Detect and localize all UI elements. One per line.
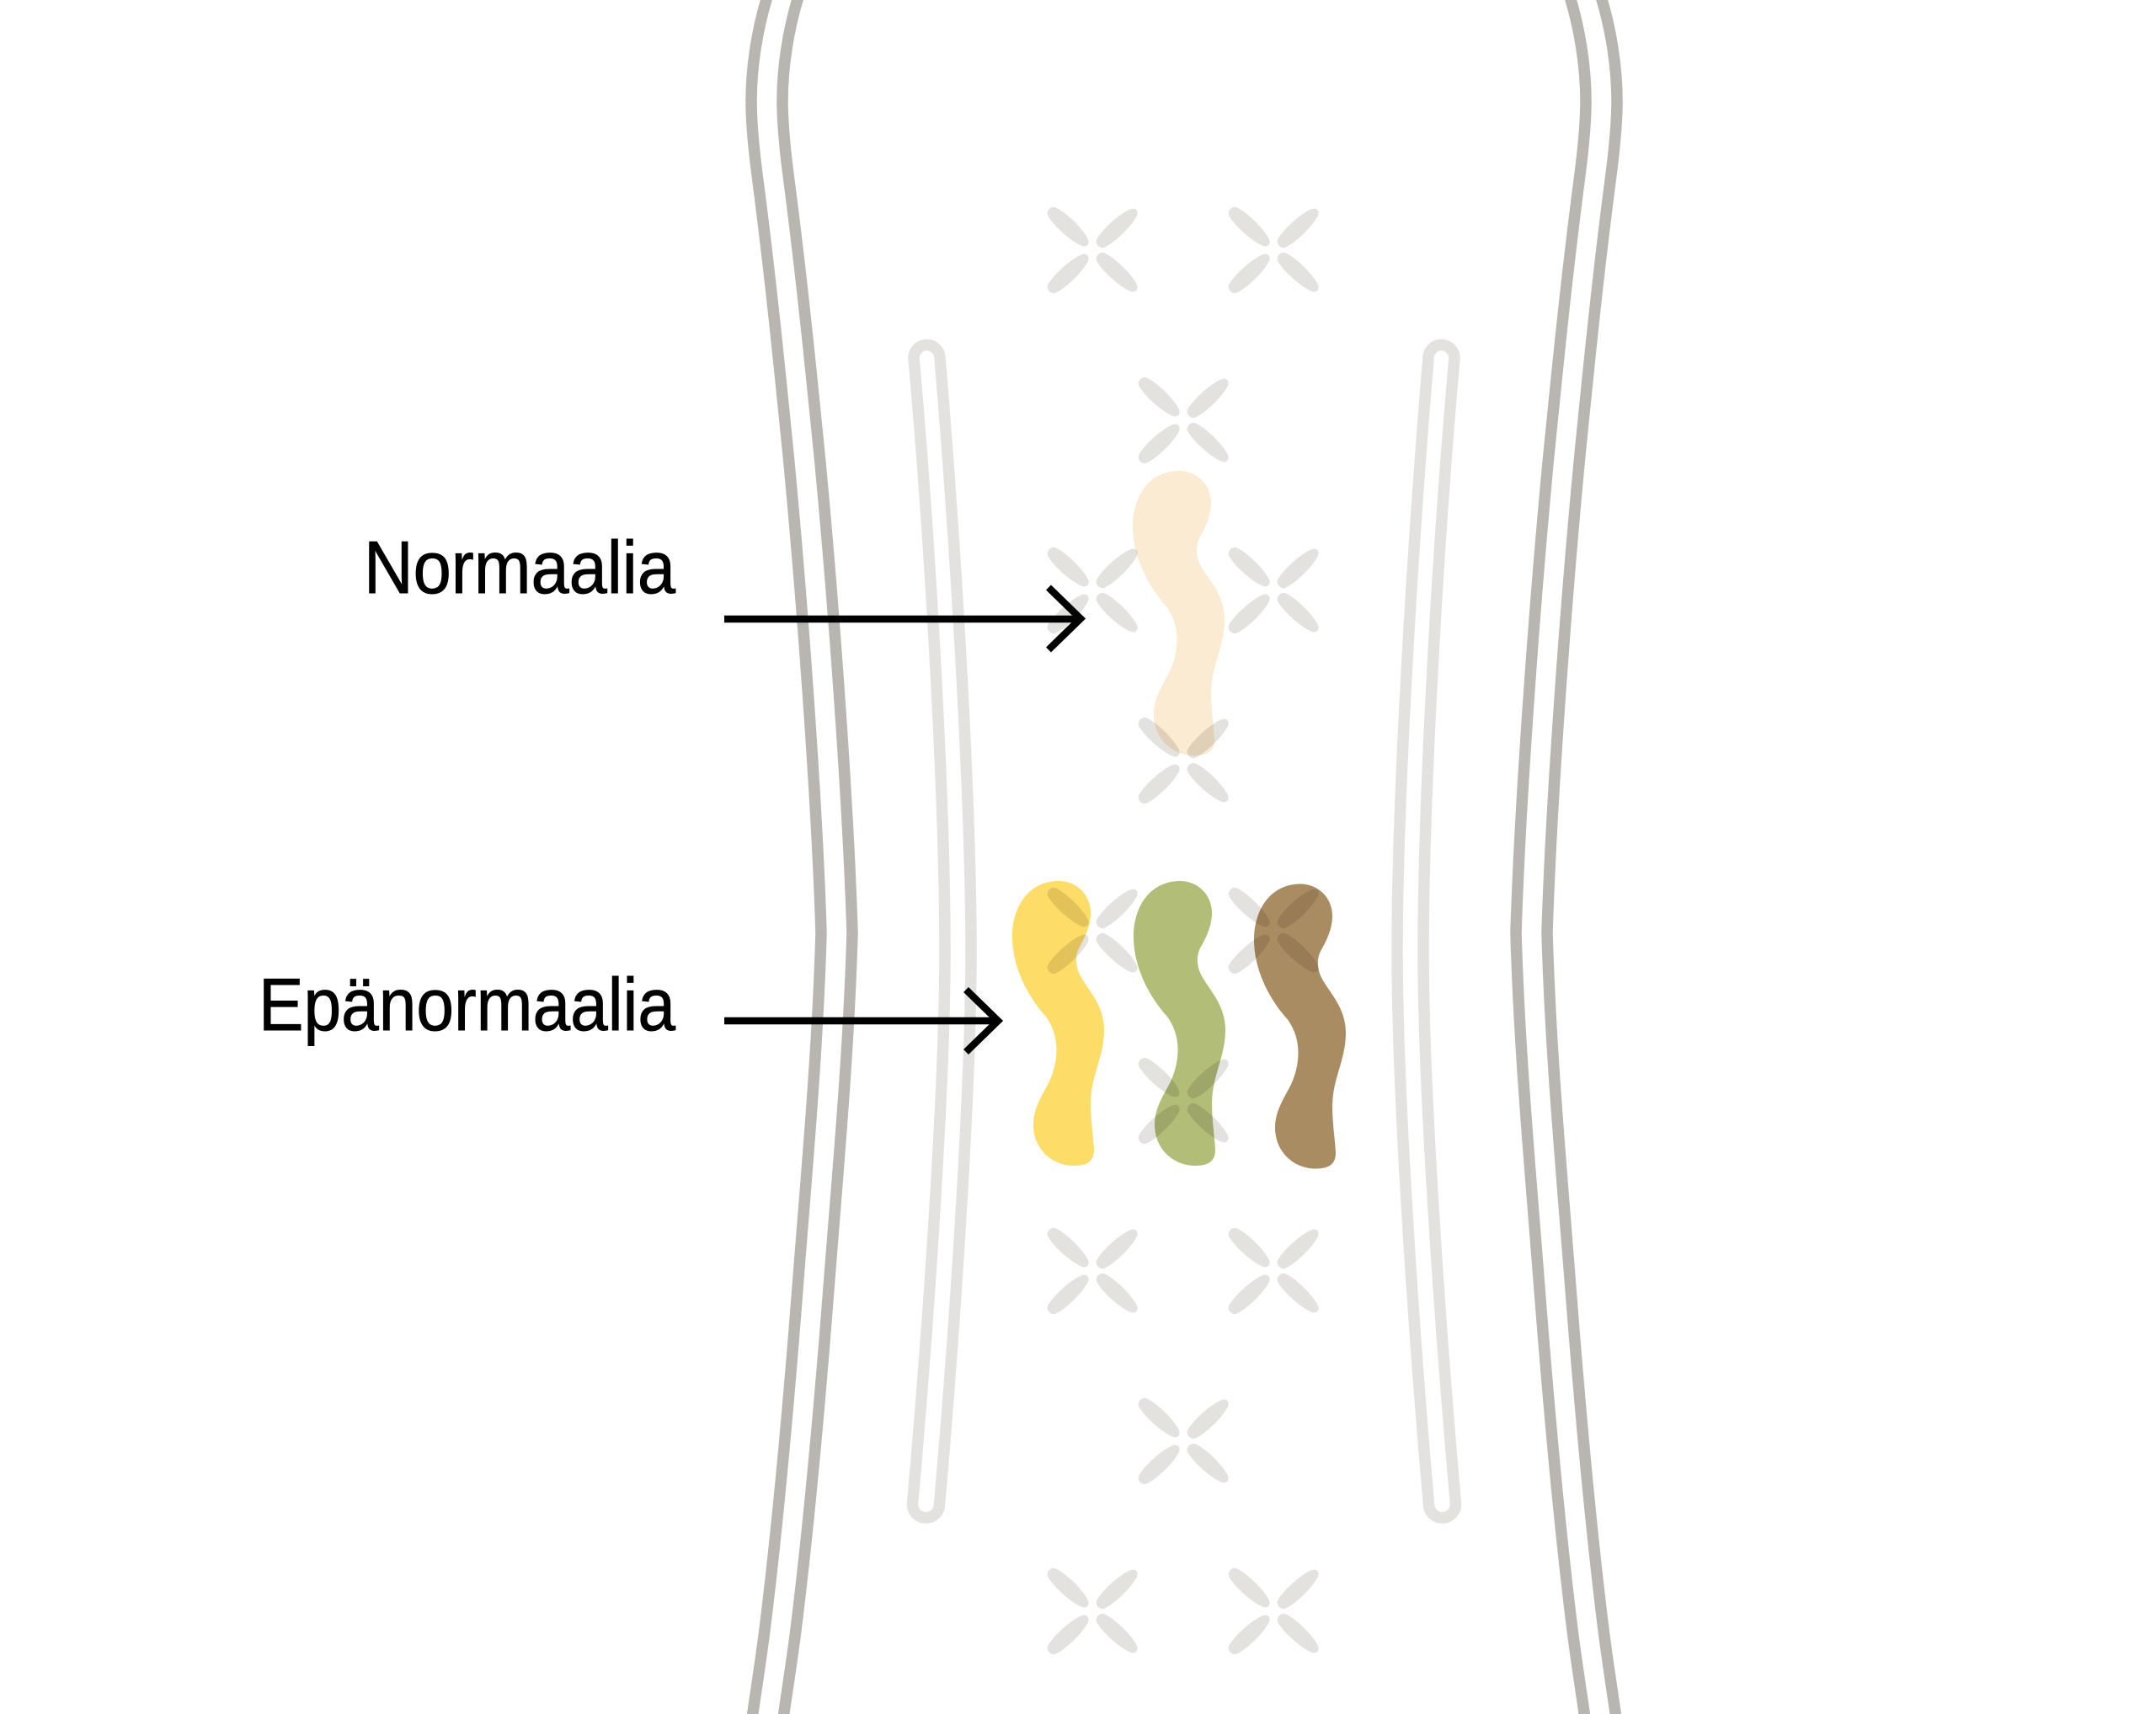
left inner edge: [782, 0, 852, 1714]
arrow: abnormal: [724, 990, 998, 1052]
right inner edge: [1516, 0, 1586, 1714]
pad outline: [751, 0, 1617, 1714]
right outer edge: [1547, 0, 1617, 1714]
blob: abnormal green: [1134, 881, 1225, 1166]
label: normal: Normaalia: [364, 526, 675, 609]
discharge blobs: [1012, 471, 1346, 1169]
blob: normal cream: [1133, 471, 1225, 756]
blob: abnormal brown: [1254, 884, 1346, 1169]
arrow: normal: [724, 588, 1081, 650]
right inner channel: [1397, 344, 1455, 1518]
left inner channel: [913, 344, 971, 1518]
blob: abnormal yellow: [1012, 881, 1104, 1166]
left outer edge: [751, 0, 821, 1714]
flower pattern: [1043, 203, 1323, 1658]
label: abnormal: Epänormaalia: [259, 963, 675, 1046]
